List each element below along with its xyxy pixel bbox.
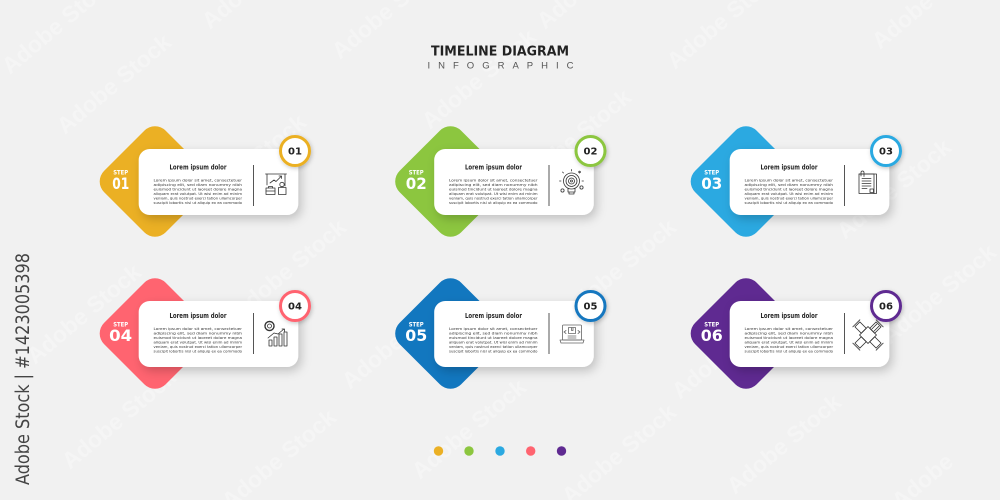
step label: STEP xyxy=(704,168,719,176)
panel: step 05 xyxy=(389,272,605,395)
text: Adobe Stock xyxy=(832,133,956,244)
card body xyxy=(744,326,834,354)
card body: aliquam erat volutpat. Ut wisi enim ad minim xyxy=(154,191,242,196)
text: Adobe Stock xyxy=(557,213,681,324)
divider xyxy=(844,165,845,206)
step number: 05 xyxy=(405,326,427,345)
color dots xyxy=(434,446,566,456)
step label: STEP xyxy=(409,168,424,176)
diamond xyxy=(93,272,217,395)
icon: presentation board xyxy=(266,174,286,194)
card body: veniam, quis nostrud exerci tation ullamcorper xyxy=(449,344,538,349)
number badge xyxy=(280,136,310,166)
number badge: 04 xyxy=(288,302,302,313)
divider xyxy=(548,313,550,354)
diamond xyxy=(684,120,808,243)
panel: step 02 xyxy=(389,120,605,243)
card body: aliquam erat volutpat. Ut wisi enim ad minim xyxy=(744,340,833,345)
card body: euismod tincidunt ut laoreet dolore magna xyxy=(744,335,834,340)
card xyxy=(139,149,298,215)
diamond xyxy=(93,120,217,243)
divider xyxy=(844,313,845,354)
text: Adobe Stock xyxy=(512,83,636,194)
divider xyxy=(253,313,254,354)
text: Adobe Stock xyxy=(22,258,146,369)
step label: STEP xyxy=(113,320,128,328)
card body: Lorem ipsum dolor sit amet, consectetuer xyxy=(744,326,833,331)
card body: euismod tincidunt ut laoreet dolore magna xyxy=(744,187,834,192)
step label: STEP xyxy=(113,168,128,176)
subtitle: INFOGRAPHIC xyxy=(428,60,574,72)
card xyxy=(139,301,298,367)
card body: aliquam erat volutpat. Ut wisi enim ad minim xyxy=(744,191,833,196)
card body: Lorem ipsum dolor sit amet, consectetuer xyxy=(449,178,538,182)
card heading: Lorem ipsum dolor xyxy=(170,164,227,172)
card body: veniam, quis nostrud exerci tation ullamcorper xyxy=(744,196,833,201)
card body: Lorem ipsum dolor sit amet, consectetuer xyxy=(449,326,538,331)
card body: adipiscing elit, sed diam nonummy nibh xyxy=(744,330,834,336)
card body: euismod tincidunt ut laoreet dolore magna xyxy=(449,187,538,192)
number badge xyxy=(280,292,310,320)
card body xyxy=(449,326,538,354)
card body: veniam, quis nostrud exerci tation ullamcorper xyxy=(154,344,242,349)
card body: euismod tincidunt ut laoreet dolore magna xyxy=(154,187,243,192)
card body: aliquam erat volutpat. Ut wisi enim ad minim xyxy=(449,191,538,196)
icon: joined hands xyxy=(845,312,891,358)
icon: light bulb with target xyxy=(560,170,584,194)
icon: laptop xyxy=(560,325,584,343)
card xyxy=(730,301,889,367)
card body xyxy=(449,178,538,205)
number badge: 01 xyxy=(288,147,302,158)
card body: suscipit lobortis nisl ut aliquip ex ea commodo xyxy=(449,200,538,205)
card body: Lorem ipsum dolor sit amet, consectetuer xyxy=(154,326,242,331)
divider xyxy=(548,165,550,206)
step number: 04 xyxy=(109,326,132,345)
card xyxy=(434,149,594,215)
panel: step 01 xyxy=(93,120,309,243)
step number: 02 xyxy=(406,174,427,193)
card body: suscipit lobortis nisl ut aliquip ex ea commodo xyxy=(449,349,538,354)
step label: STEP xyxy=(704,320,719,328)
card heading: Lorem ipsum dolor xyxy=(760,164,818,172)
step number: 03 xyxy=(701,174,722,193)
card body: suscipit lobortis nisl ut aliquip ex ea commodo xyxy=(744,349,834,354)
card body: suscipit lobortis nisl ut aliquip ex ea commodo xyxy=(154,200,243,205)
card body: Lorem ipsum dolor sit amet, consectetuer xyxy=(154,178,242,182)
card body: suscipit lobortis nisl ut aliquip ex ea commodo xyxy=(744,200,834,205)
card body: veniam, quis nostrud exerci tation ullamcorper xyxy=(449,196,538,201)
card body xyxy=(154,326,243,354)
number badge xyxy=(872,136,900,166)
text: Adobe Stock xyxy=(52,28,176,139)
card heading: Lorem ipsum dolor xyxy=(760,312,818,320)
icon: document with clip xyxy=(859,171,876,194)
stock id text: Adobe Stock | #1423005398 xyxy=(13,253,34,485)
number badge: 02 xyxy=(584,147,597,158)
card body: adipiscing elit, sed diam nonummy nibh xyxy=(449,330,538,336)
card heading: Lorem ipsum dolor xyxy=(465,164,523,172)
text: Adobe Stock xyxy=(667,293,791,404)
panel: step 03 xyxy=(684,120,900,243)
card body: adipiscing elit, sed diam nonummy nibh xyxy=(449,182,538,187)
panel: step 04 xyxy=(93,272,309,395)
card body xyxy=(154,178,243,205)
card body: veniam, quis nostrud exerci tation ullamcorper xyxy=(154,196,242,201)
card body: adipiscing elit, sed diam nonummy nibh xyxy=(744,182,834,187)
text: Adobe Stock xyxy=(877,238,1000,349)
card body: suscipit lobortis nisl ut aliquip ex ea commodo xyxy=(154,349,243,354)
text: Adobe Stock xyxy=(57,363,181,474)
card body: euismod tincidunt ut laoreet dolore magna xyxy=(154,335,243,340)
card body: euismod tincidunt ut laoreet dolore magna xyxy=(449,335,538,340)
icon: gear and bar chart xyxy=(265,322,287,346)
card heading: Lorem ipsum dolor xyxy=(170,312,227,320)
text: Adobe Stock xyxy=(227,213,351,324)
card body: aliquam erat volutpat. Ut wisi enim ad minim xyxy=(449,340,538,345)
card xyxy=(730,149,889,215)
diamond xyxy=(389,272,512,395)
text: Adobe Stock xyxy=(722,388,846,499)
diamond xyxy=(389,120,512,243)
card body: adipiscing elit, sed diam nonummy nibh xyxy=(154,330,243,336)
step number: 01 xyxy=(112,174,129,193)
step number: 06 xyxy=(701,326,723,345)
text: Adobe Stock xyxy=(407,373,531,484)
diamond xyxy=(684,272,808,395)
number badge: 06 xyxy=(879,302,893,313)
card xyxy=(434,301,594,367)
step label: STEP xyxy=(409,320,424,328)
number badge: 03 xyxy=(879,147,893,158)
text: Adobe Stock xyxy=(337,283,461,394)
card body: veniam, quis nostrud exerci tation ullamcorper xyxy=(744,344,833,349)
number badge xyxy=(872,292,900,320)
card body xyxy=(744,178,834,205)
number badge: 05 xyxy=(584,302,597,313)
number badge xyxy=(576,292,605,320)
text: Adobe Stock xyxy=(187,108,311,219)
card body: Lorem ipsum dolor sit amet, consectetuer xyxy=(744,178,833,182)
title: TIMELINE DIAGRAM xyxy=(431,44,569,60)
card heading: Lorem ipsum dolor xyxy=(465,312,523,320)
card body: adipiscing elit, sed diam nonummy nibh xyxy=(154,182,243,187)
text: Adobe Stock xyxy=(417,23,541,134)
card body: aliquam erat volutpat. Ut wisi enim ad minim xyxy=(154,340,242,345)
panel: step 06 xyxy=(684,272,900,395)
divider xyxy=(253,165,254,206)
number badge xyxy=(576,136,605,166)
